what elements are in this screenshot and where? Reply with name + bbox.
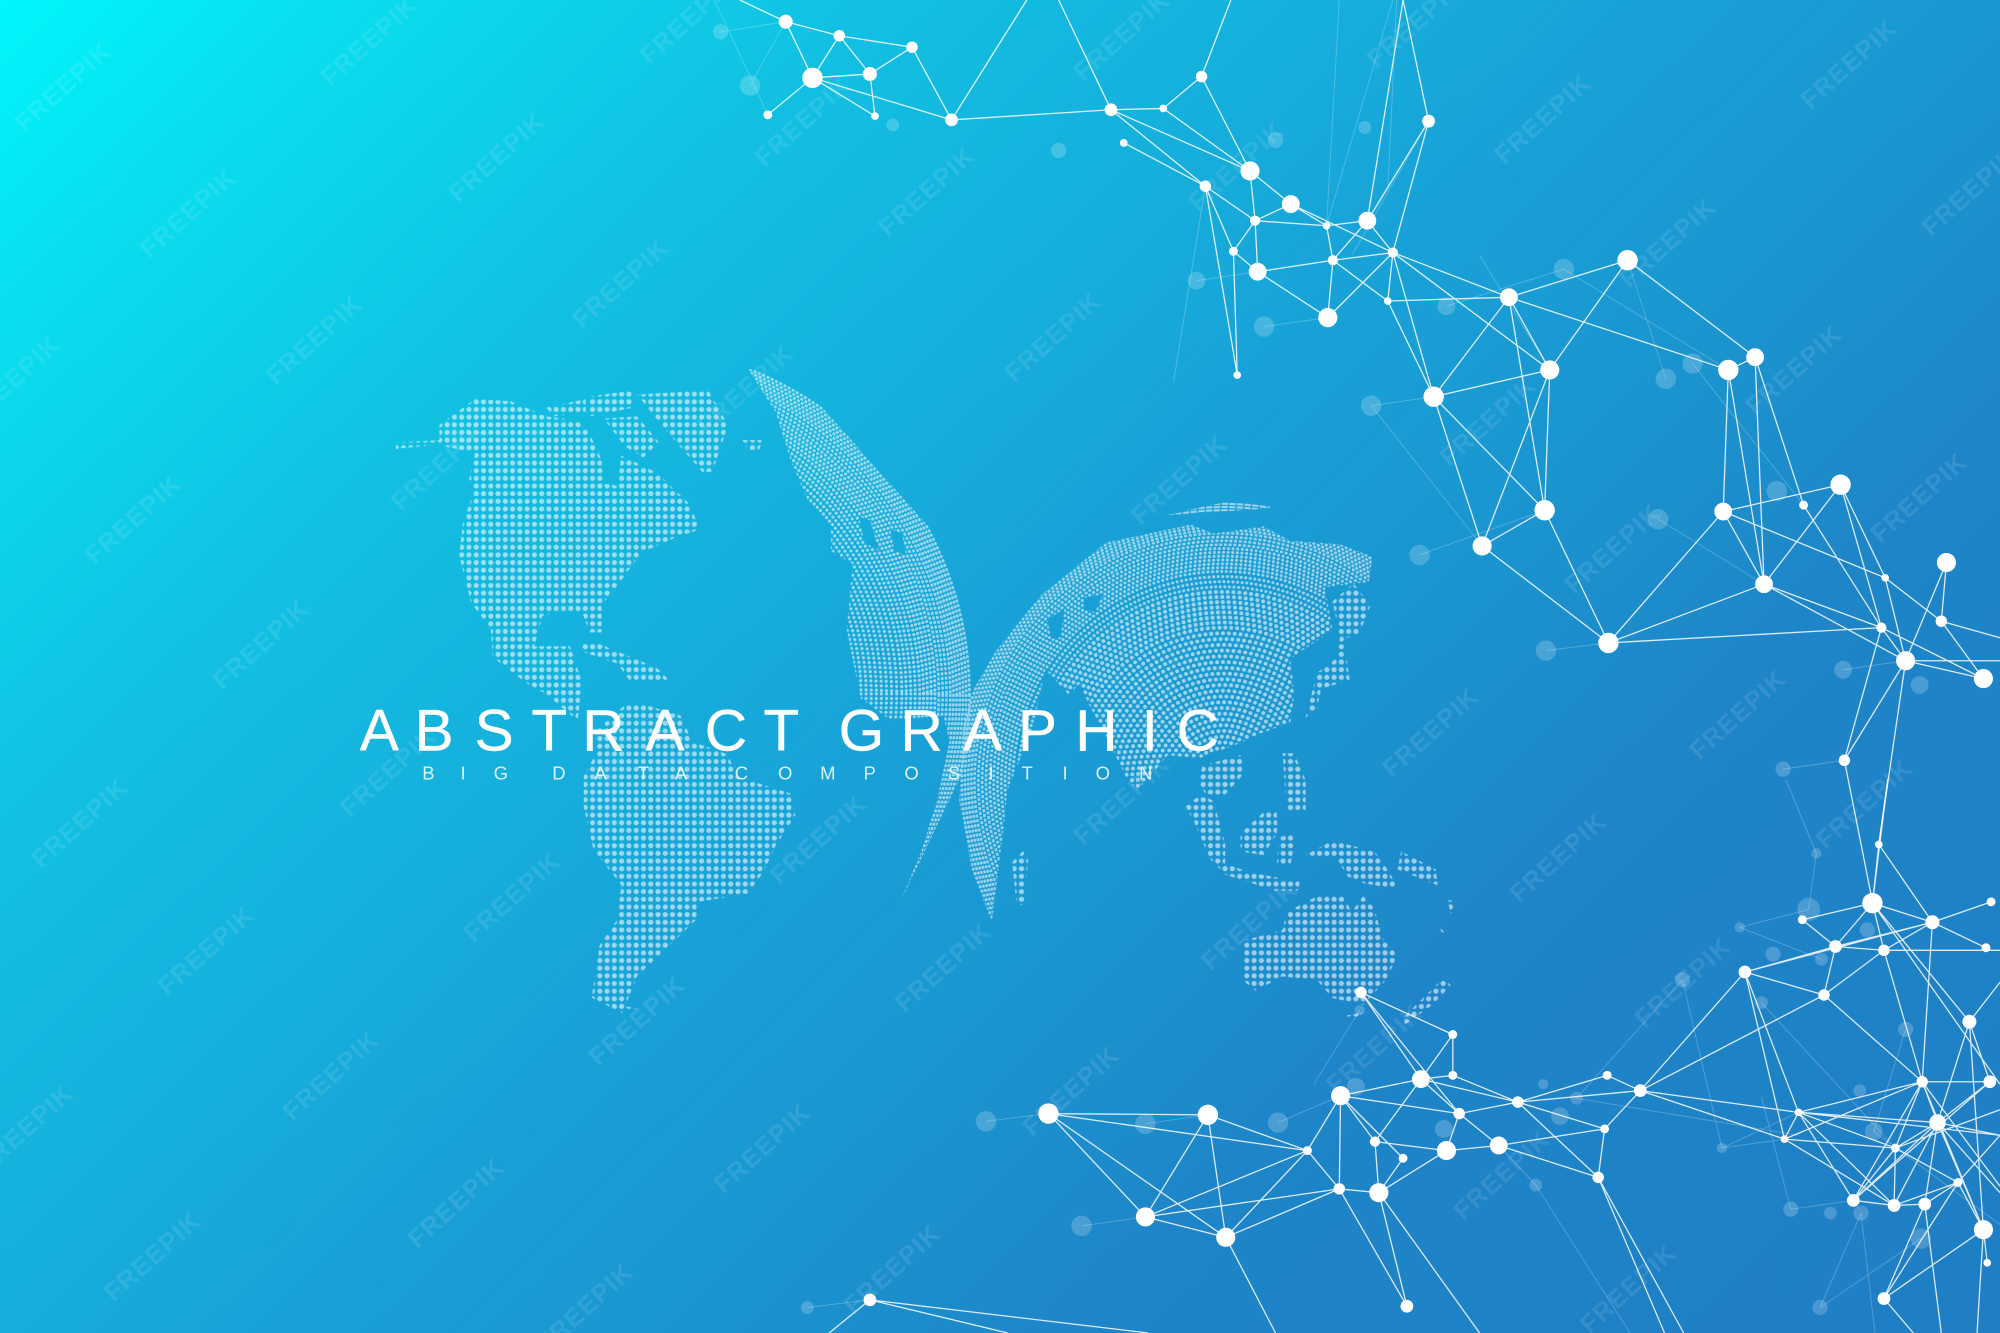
watermark pattern: FREEPIK xyxy=(1000,287,1107,388)
watermark pattern: FREEPIK xyxy=(1685,664,1792,765)
watermark pattern: FREEPIK xyxy=(80,469,187,570)
top cluster nodes xyxy=(763,15,1435,379)
right middle cluster lines xyxy=(1434,260,2000,902)
watermark pattern: FREEPIK xyxy=(1505,807,1612,908)
network: top cluster xyxy=(740,0,1550,397)
bottom cluster lines xyxy=(829,992,1684,1333)
network: right middle cluster xyxy=(1423,250,2000,902)
watermark pattern: FREEPIK xyxy=(1377,682,1485,783)
watermark pattern: FREEPIK xyxy=(1741,320,1848,421)
arctic islands arc xyxy=(1166,502,1272,516)
watermark pattern: FREEPIK xyxy=(459,847,566,948)
watermark pattern: FREEPIK xyxy=(1017,1041,1125,1141)
watermark pattern: FREEPIK xyxy=(1560,499,1667,599)
subtitle: BIG DATA COMPOSITION xyxy=(422,762,1152,783)
title: ABSTRACT GRAPHIC xyxy=(360,699,1219,764)
watermark pattern: FREEPIK xyxy=(584,971,691,1071)
watermark pattern: FREEPIK xyxy=(1795,14,1903,115)
watermark pattern: FREEPIK xyxy=(153,900,260,1001)
watermark pattern: FREEPIK xyxy=(261,289,369,390)
watermark pattern: FREEPIK xyxy=(10,37,117,138)
watermark pattern: FREEPIK xyxy=(1196,875,1304,976)
lower right cluster nodes xyxy=(1739,841,1996,1305)
lower right cluster lines xyxy=(1640,779,2000,1333)
network: lower right cluster xyxy=(1640,779,2000,1333)
network: faint background nodes xyxy=(713,24,1931,1315)
watermark pattern: FREEPIK xyxy=(1126,430,1233,530)
watermark pattern: FREEPIK xyxy=(873,141,981,242)
watermark pattern: FREEPIK xyxy=(278,1025,385,1126)
continents: North and South America xyxy=(396,391,796,1013)
watermark pattern: FREEPIK xyxy=(1811,754,1918,854)
watermark pattern: FREEPIK xyxy=(890,917,997,1018)
left globe edge: Europe and Africa arc xyxy=(748,369,971,901)
watermark pattern: FREEPIK xyxy=(1449,1125,1556,1226)
watermark pattern: FREEPIK xyxy=(1183,116,1291,217)
watermark pattern: FREEPIK xyxy=(1630,932,1737,1033)
watermark pattern: FREEPIK xyxy=(567,233,675,334)
watermark pattern: FREEPIK xyxy=(207,594,315,695)
watermark pattern: FREEPIK xyxy=(1435,371,1542,472)
watermark pattern: FREEPIK xyxy=(1614,192,1722,293)
watermark pattern: FREEPIK xyxy=(99,1207,207,1307)
watermark pattern: FREEPIK xyxy=(386,416,494,516)
watermark pattern: FREEPIK xyxy=(1489,69,1597,169)
top cluster lines xyxy=(740,0,1550,397)
watermark pattern: FREEPIK xyxy=(1321,999,1429,1099)
network: bottom cluster xyxy=(829,987,1684,1333)
watermark pattern: FREEPIK xyxy=(403,1153,510,1254)
dotted world map: two globes xyxy=(396,369,1454,1024)
watermark pattern: FREEPIK xyxy=(709,1098,816,1199)
watermark pattern: FREEPIK xyxy=(443,107,551,208)
watermark pattern: FREEPIK xyxy=(1068,750,1176,851)
watermark pattern: FREEPIK xyxy=(839,1219,946,1320)
network: faint connecting lines xyxy=(714,0,2000,1333)
bottom cluster nodes xyxy=(864,987,1647,1313)
islands: Japan, South-East Asia, Australia, New Zealand xyxy=(1012,584,1454,1024)
watermark pattern: FREEPIK xyxy=(692,339,800,440)
watermark pattern: FREEPIK xyxy=(750,71,857,172)
watermark pattern: FREEPIK xyxy=(135,163,242,264)
watermark pattern: FREEPIK xyxy=(335,722,443,823)
watermark pattern: FREEPIK xyxy=(765,789,872,890)
watermark pattern: FREEPIK xyxy=(26,773,134,874)
right globe: Asia arc xyxy=(959,524,1372,919)
right middle cluster nodes xyxy=(1423,250,1993,766)
watermark pattern: FREEPIK xyxy=(1866,448,1973,548)
